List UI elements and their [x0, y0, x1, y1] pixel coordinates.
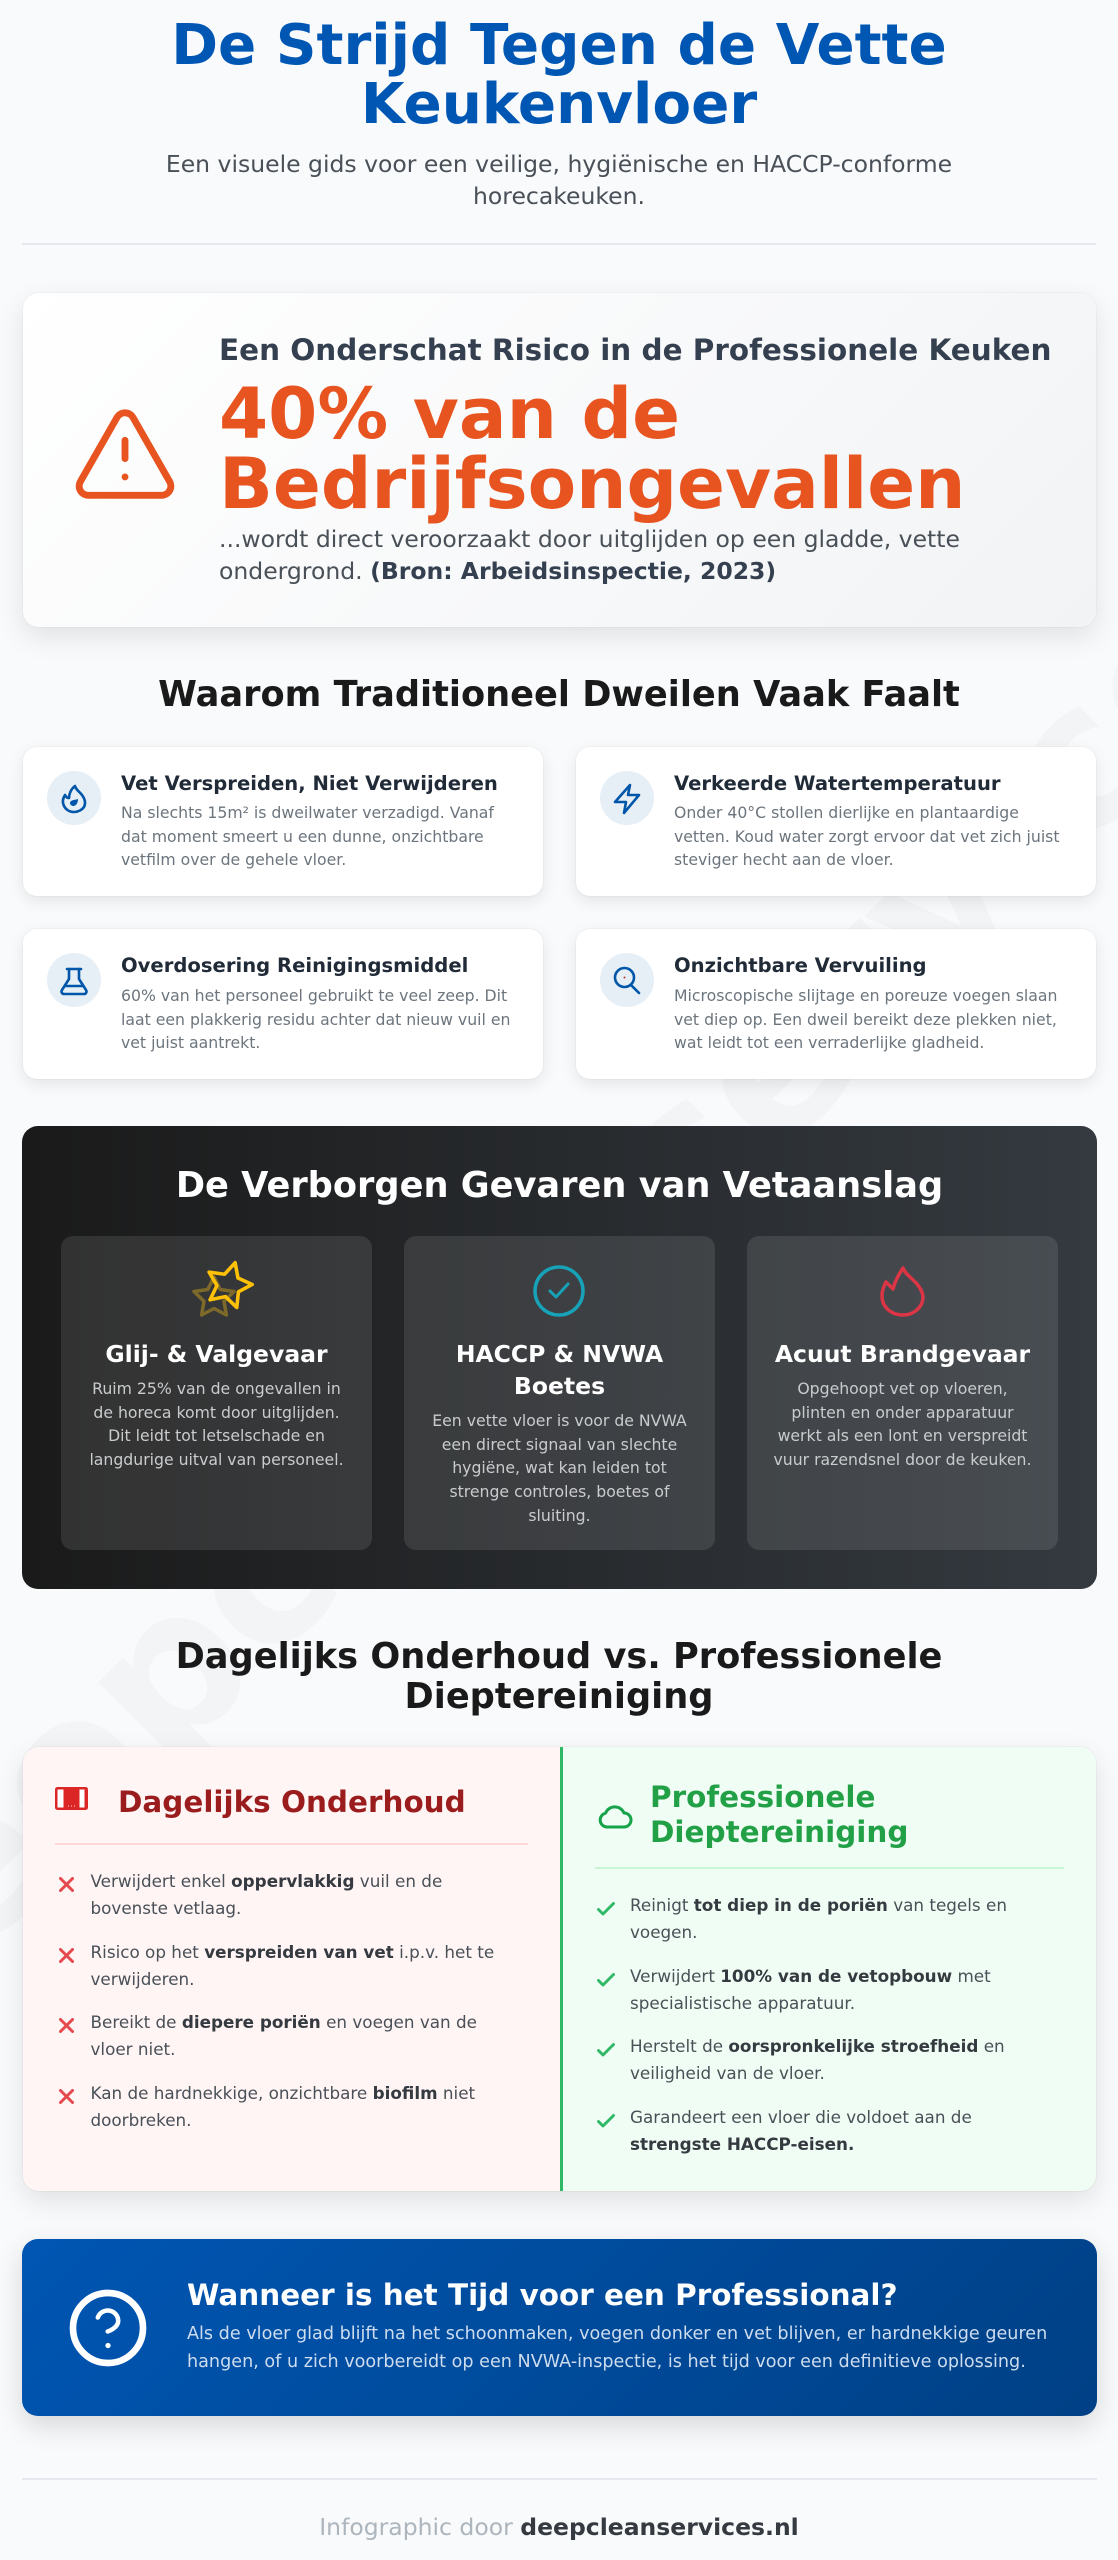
item 1 — [59, 1871, 442, 1918]
item 2 — [59, 1942, 494, 1989]
card text: Na slechts 15m² is dweilwater verzadigd. Vanaf — [121, 803, 494, 822]
card text: werkt als een lont en verspreidt — [778, 1426, 1027, 1445]
icon: warning triangle — [76, 409, 174, 499]
card: fire hazard — [747, 1236, 1058, 1550]
item 3 — [597, 2036, 1005, 2083]
item 2: verwijderen. — [90, 1969, 195, 1989]
card text: vetten. Koud water zorgt ervoor dat vet zich juist — [674, 827, 1060, 846]
card text: langdurige uitval van personeel. — [89, 1450, 344, 1469]
heading: comparison — [176, 1636, 942, 1717]
item 1: Verwijdert enkel oppervlakkig vuil en de — [90, 1871, 442, 1891]
heading: comparison: Dagelijks Onderhoud vs. Professionele — [176, 1636, 942, 1677]
card title: Vet Verspreiden, Niet Verwijderen — [121, 772, 498, 795]
card text: 60% van het personeel gebruikt te veel zeep. Dit — [121, 986, 507, 1005]
item 3: Bereikt de diepere poriën en voegen van de — [90, 2012, 477, 2032]
title — [171, 13, 947, 137]
card text: plinten en onder apparatuur — [791, 1403, 1014, 1422]
card text: een direct signaal van slechte — [442, 1435, 677, 1454]
column heading: Professionele — [650, 1780, 875, 1814]
subtitle: horecakeuken. — [473, 182, 645, 210]
card text: Opgehoopt vet op vloeren, — [797, 1379, 1008, 1398]
panel: call to action — [22, 2239, 1097, 2416]
item 4: Garandeert een vloer die voldoet aan de — [630, 2106, 972, 2126]
column heading: Dagelijks Onderhoud — [118, 1785, 466, 1819]
card text: Een vette vloer is voor de NVWA — [432, 1411, 687, 1430]
panel: verkeerde watertemperatuur — [576, 747, 1096, 896]
card text — [774, 1379, 1031, 1469]
item 1: voegen. — [630, 1922, 697, 1942]
item 4 — [59, 2082, 475, 2130]
card title: Verkeerde Watertemperatuur — [674, 772, 1001, 795]
panel: hidden dangers — [22, 1126, 1097, 1589]
icon: check circle — [533, 1265, 585, 1317]
card title — [456, 1340, 663, 1400]
hero big statistic: Bedrijfsongevallen — [219, 442, 966, 525]
icon: flask — [47, 953, 101, 1007]
card text — [432, 1411, 687, 1525]
item 1 — [597, 1895, 1007, 1942]
heading: comparison: Dieptereiniging — [405, 1676, 713, 1717]
card text: laat een plakkerig residu achter dat nieuw vuil en — [121, 1010, 510, 1029]
item 2 — [597, 1966, 991, 2013]
subtitle — [166, 150, 952, 210]
card text: Dit leidt tot letselschade en — [108, 1426, 325, 1445]
title: De Strijd Tegen de Vette — [171, 13, 947, 78]
icon: lightning bolt — [600, 771, 654, 825]
card text: vetfilm over de gehele vloer. — [121, 850, 346, 869]
card text — [121, 986, 510, 1052]
column: professional deep cleaning — [563, 1747, 1096, 2191]
card text — [89, 1379, 344, 1469]
CTA text: hangen, of u zich voorbereidt op een NVWA-inspectie, is het tijd voor een definitieve oplossing. — [187, 2352, 1026, 2372]
icon: flame — [880, 1266, 925, 1317]
column: daily maintenance — [23, 1747, 560, 2191]
panel: comparison — [23, 1747, 1096, 2191]
card text: vuur razendsnel door de keuken. — [774, 1450, 1031, 1469]
item 1: bovenste vetlaag. — [90, 1898, 241, 1918]
card text: sluiting. — [528, 1506, 591, 1525]
icon: magnifier — [600, 953, 654, 1007]
card title: Boetes — [514, 1372, 605, 1400]
column heading: Dieptereiniging — [650, 1815, 908, 1849]
footer credit: Infographic door deepcleanservices.nl — [319, 2513, 799, 2541]
icon: question circle — [70, 2290, 146, 2366]
CTA heading: Wanneer is het Tijd voor een Professional? — [187, 2278, 898, 2312]
title: Keukenvloer — [361, 72, 757, 137]
item 3: vloer niet. — [90, 2039, 175, 2059]
hero description: ondergrond. (Bron: Arbeidsinspectie, 2023) — [219, 556, 776, 584]
item 4: Kan de hardnekkige, onzichtbare biofilm niet — [90, 2082, 475, 2102]
icon: cloud — [598, 1805, 632, 1828]
item 3 — [59, 2012, 477, 2059]
panel: onzichtbare vervuiling — [576, 929, 1096, 1079]
CTA text: Als de vloer glad blijft na het schoonmaken, voegen donker en vet blijven, er hardnekkige geuren — [187, 2324, 1047, 2344]
hero heading: Een Onderschat Risico in de Professionele Keuken — [219, 333, 1051, 367]
panel: hero risk statistic — [23, 293, 1096, 627]
card text: Onder 40°C stollen dierlijke en plantaardige — [674, 803, 1019, 822]
item 2: specialistische apparatuur. — [630, 1993, 855, 2013]
card title: Onzichtbare Vervuiling — [674, 954, 927, 977]
card text: dat moment smeert u een dunne, onzichtbare — [121, 827, 484, 846]
card title: Overdosering Reinigingsmiddel — [121, 954, 468, 977]
panel heading: De Verborgen Gevaren van Vetaanslag — [176, 1165, 943, 1206]
hero big statistic — [219, 372, 966, 525]
card text — [121, 803, 494, 869]
card title: Glij- & Valgevaar — [105, 1340, 328, 1368]
column heading — [650, 1780, 908, 1849]
card text: Microscopische slijtage en poreuze voegen slaan — [674, 986, 1057, 1005]
item 3: veiligheid van de vloer. — [630, 2063, 825, 2083]
card text: wat leidt tot een verraderlijke gladheid. — [674, 1033, 984, 1052]
item 2: Verwijdert 100% van de vetopbouw met — [630, 1966, 991, 1986]
card: HACCP and NVWA — [404, 1236, 715, 1550]
card: slip hazard — [61, 1236, 372, 1550]
card text: vet juist aantrekt. — [121, 1033, 260, 1052]
item 4 — [597, 2106, 972, 2154]
hero description: ...wordt direct veroorzaakt door uitglijden op een gladde, vette — [219, 525, 960, 553]
hero description — [219, 525, 960, 584]
card text: Ruim 25% van de ongevallen in — [92, 1379, 341, 1398]
card text: de horeca komt door uitglijden. — [93, 1403, 340, 1422]
card text: strenge controles, boetes of — [449, 1482, 670, 1501]
card title: Acuut Brandgevaar — [775, 1340, 1030, 1368]
card text — [674, 986, 1057, 1052]
heading: why mopping fails: Waarom Traditioneel Dweilen Vaak Faalt — [158, 674, 960, 715]
item 4: strengste HACCP-eisen. — [630, 2134, 854, 2154]
item 1: Reinigt tot diep in de poriën van tegels en — [630, 1895, 1007, 1915]
card text: vet diep op. Een dweil bereikt deze plekken niet, — [674, 1010, 1057, 1029]
hero big statistic: 40% van de — [219, 372, 680, 455]
panel: vet verspreiden — [23, 747, 543, 896]
card text: steviger hecht aan de vloer. — [674, 850, 894, 869]
card text — [674, 803, 1060, 869]
icon: mop bucket — [55, 1787, 88, 1810]
item 2: Risico op het verspreiden van vet i.p.v. het te — [90, 1942, 494, 1962]
card text: hygiëne, wat kan leiden tot — [452, 1458, 667, 1477]
subtitle: Een visuele gids voor een veilige, hygiënische en HACCP-conforme — [166, 150, 952, 178]
icon: flame — [47, 771, 101, 825]
CTA text — [187, 2324, 1047, 2372]
card title: HACCP & NVWA — [456, 1340, 663, 1368]
icon: stars — [192, 1260, 254, 1317]
item 3: Herstelt de oorspronkelijke stroefheid en — [630, 2036, 1005, 2056]
panel: overdosering — [23, 929, 543, 1079]
item 4: doorbreken. — [90, 2110, 192, 2130]
